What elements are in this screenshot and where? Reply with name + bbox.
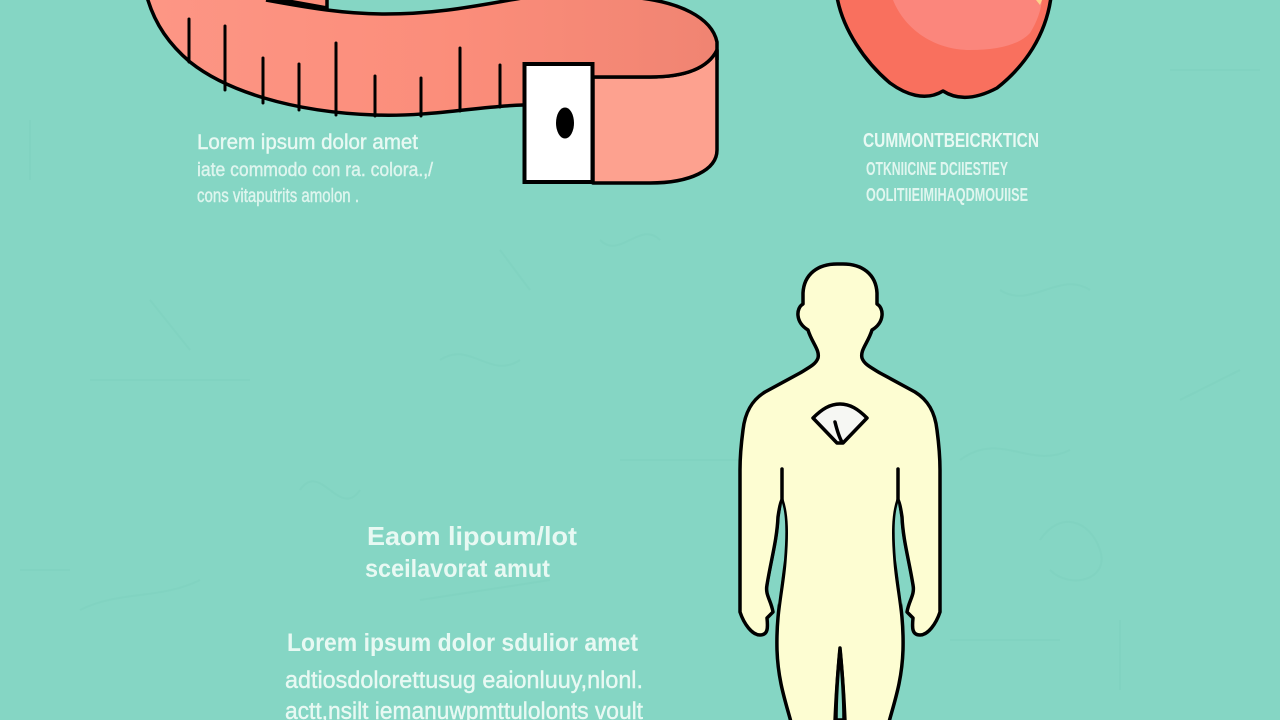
- text block: tape caption: Lorem ipsum dolor amet: [197, 131, 418, 154]
- tape tab hole: [556, 108, 574, 138]
- text block: body paragraph: Lorem ipsum dolor sdulior amet: [287, 629, 639, 657]
- text block: tape caption: [197, 131, 434, 207]
- tape upper stub: [266, 0, 327, 8]
- text block: apple caption: OOLITIIEIMIHAQDMOUIISE: [866, 185, 1028, 205]
- text block: tape caption: cons vitaputrits amolon .: [197, 186, 359, 207]
- text block: short heading: sceilavorat amut: [365, 555, 551, 583]
- left arm gap: [769, 503, 785, 605]
- apple body: [837, 0, 1051, 97]
- tape tick marks: [189, 19, 500, 116]
- measuring tape: [147, 0, 717, 183]
- text block: apple caption: [863, 130, 1039, 205]
- text block: apple caption: OTKNIICINE DCIIESTIEY: [866, 159, 1008, 179]
- text block: body paragraph: [285, 629, 643, 720]
- apple glint: [1036, 0, 1042, 5]
- text block: short heading: Eaom lipoum/lot: [367, 521, 577, 551]
- leg gap: [836, 650, 844, 720]
- arm lines: [782, 469, 898, 500]
- text block: apple caption: CUMMONTBEICRKTICN: [863, 130, 1039, 152]
- text block: body paragraph: adtiosdolorettusug eaionluuy,nlonl.: [285, 667, 643, 694]
- right arm gap: [895, 503, 911, 605]
- human body figure: [740, 264, 940, 720]
- tape back band: [593, 50, 717, 183]
- text block: short heading: [365, 521, 577, 583]
- tape main band: [147, 0, 717, 115]
- body silhouette: [740, 264, 940, 720]
- scale icon on chest: [813, 404, 867, 443]
- apple: [837, 0, 1051, 97]
- tape end tab: [524, 64, 592, 182]
- apple highlight: [893, 0, 1042, 50]
- text block: tape caption: iate commodo con ra. colora.,/: [197, 160, 434, 181]
